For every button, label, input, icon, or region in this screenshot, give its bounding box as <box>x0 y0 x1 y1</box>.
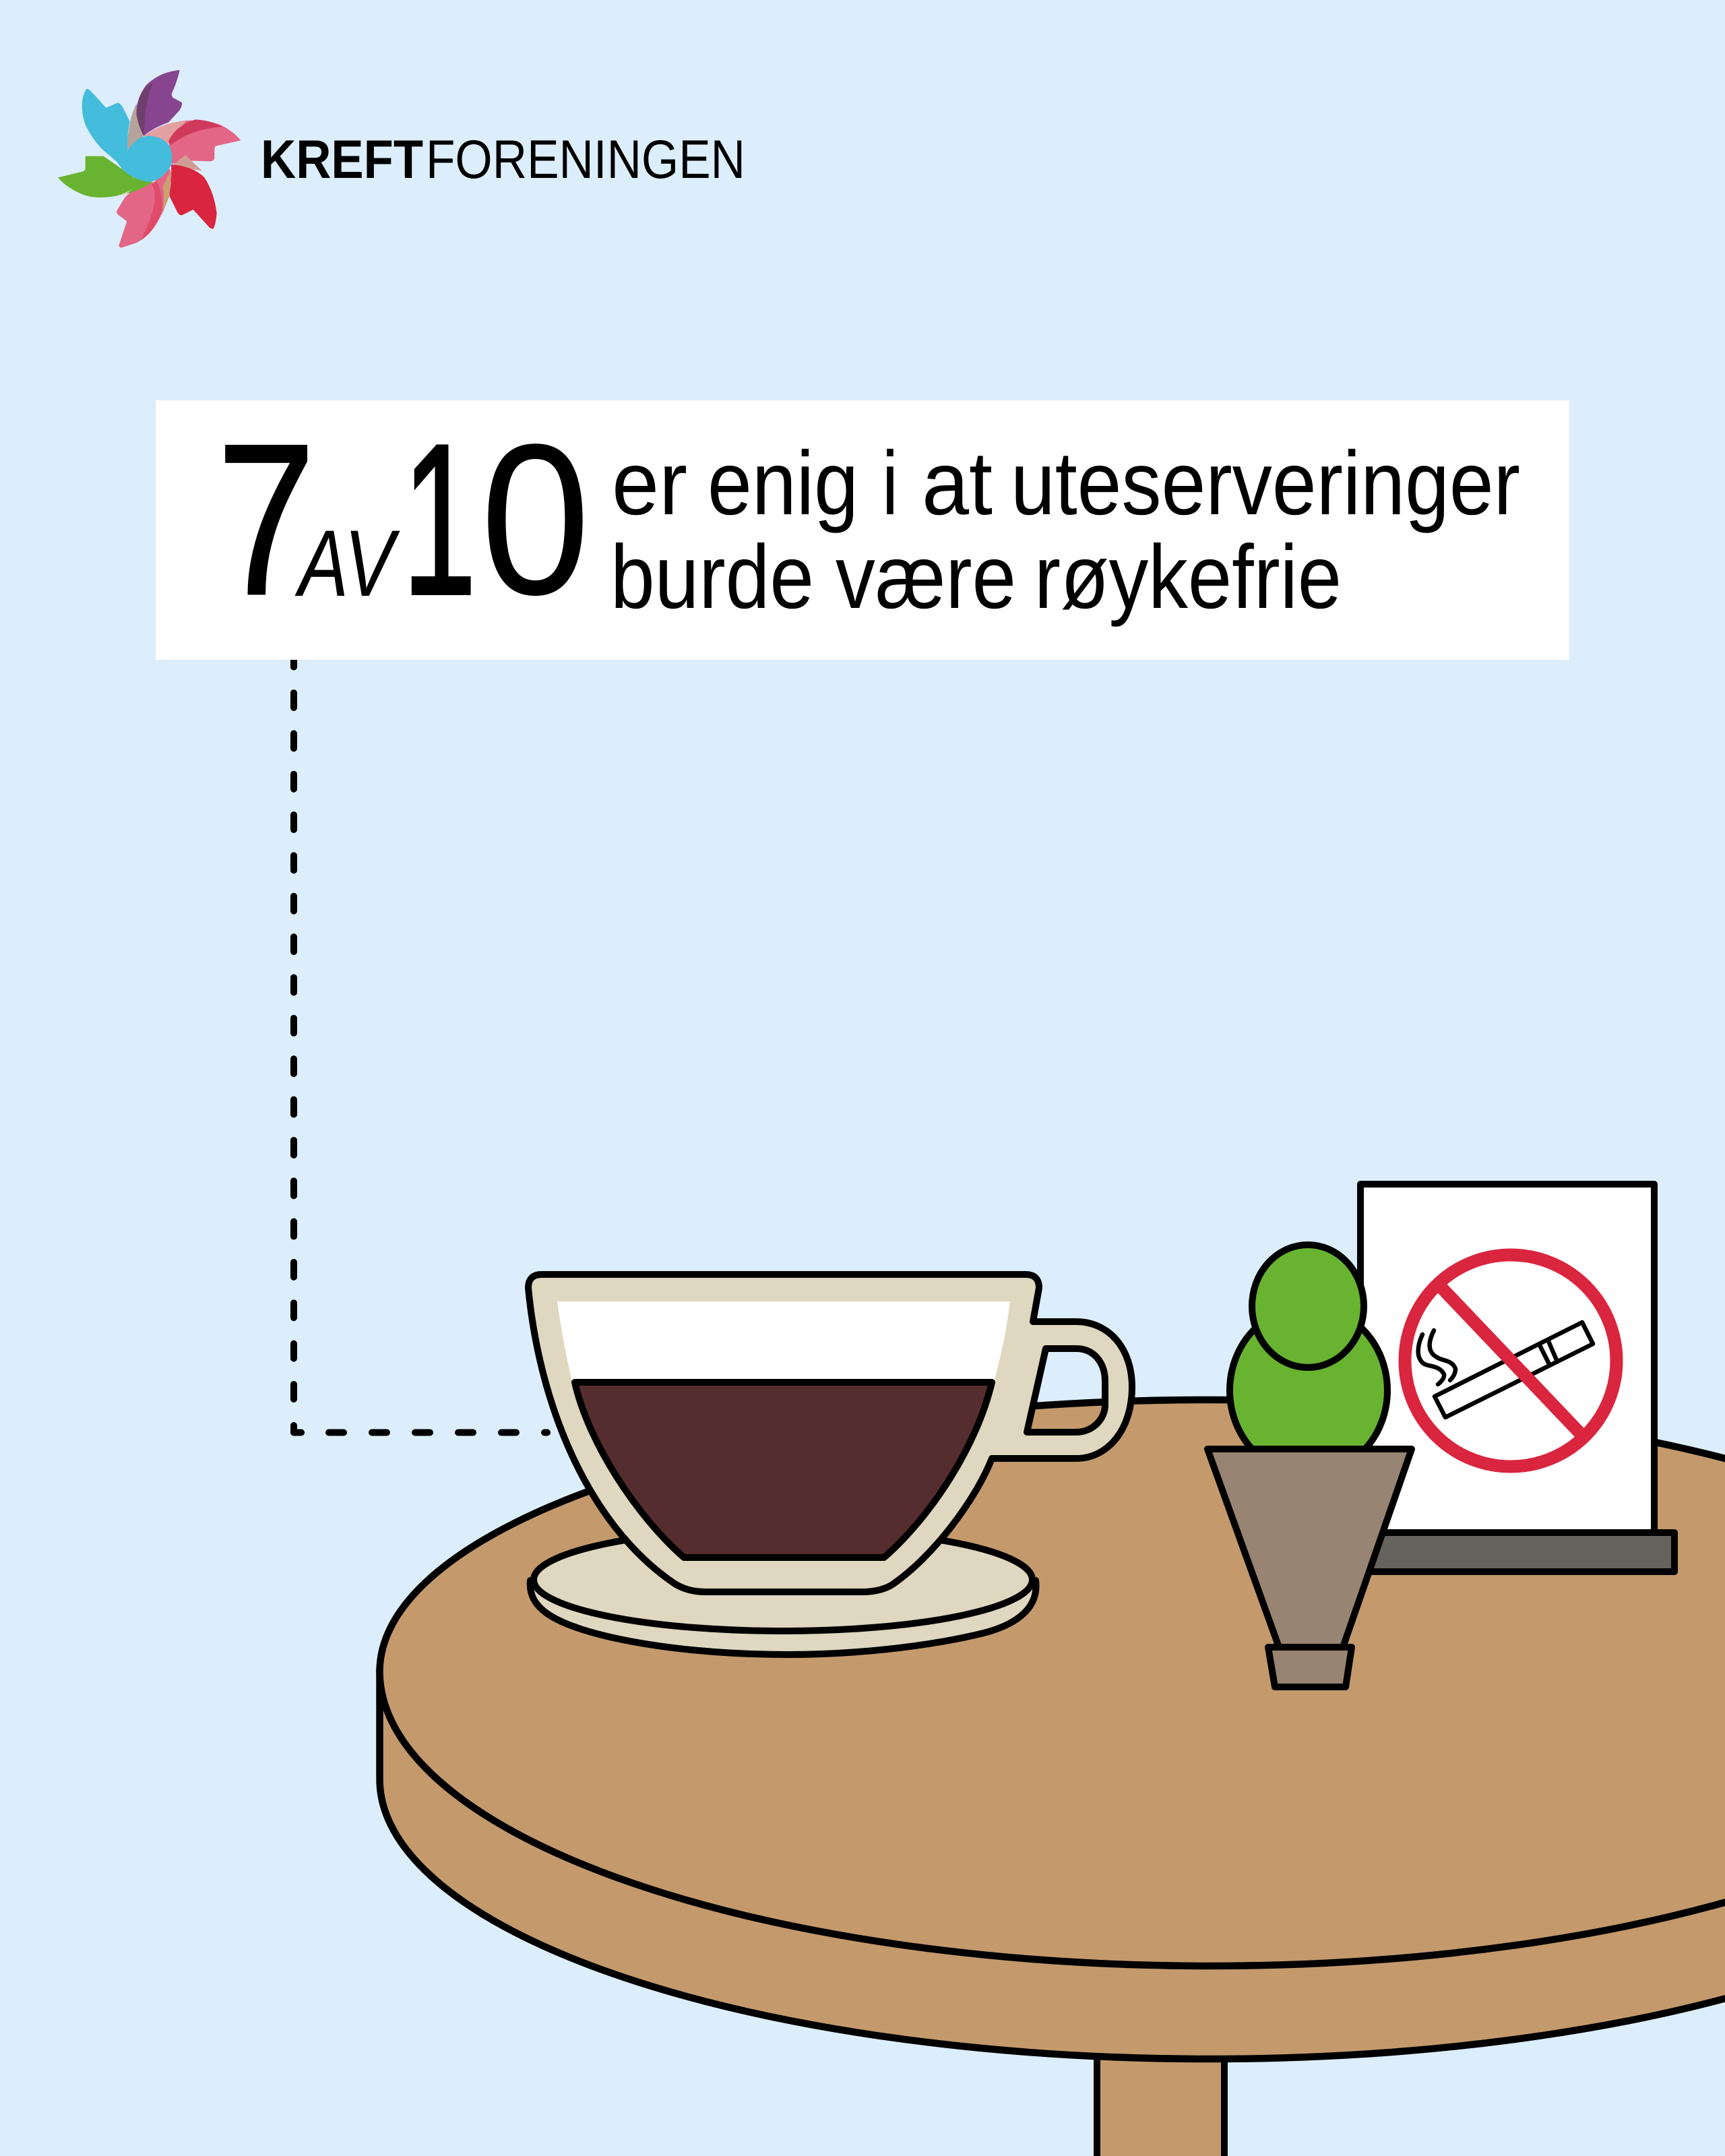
saucer <box>530 1529 1036 1655</box>
cup milk foam <box>557 1301 1010 1382</box>
pot foot <box>1268 1647 1352 1687</box>
headline text: er <box>612 433 687 534</box>
logo wordmark: FORENINGEN <box>426 129 745 190</box>
icon: cigarette with smoke <box>1418 1322 1593 1417</box>
potted plant <box>1208 1245 1412 1687</box>
coffee <box>575 1382 992 1558</box>
plant foliage <box>1230 1245 1387 1475</box>
coffee cup and saucer <box>528 1274 1132 1655</box>
cup body and handle <box>528 1274 1132 1592</box>
logo: Kreftforeningen <box>58 70 745 248</box>
dashed connector line <box>294 652 547 1433</box>
logo wordmark <box>261 129 745 190</box>
icon: flower logo mark <box>58 70 241 248</box>
headline text <box>610 433 1520 627</box>
statistic: 7 av 10: 0 <box>480 399 590 640</box>
headline panel <box>156 399 1569 660</box>
icon: prohibition circle <box>1405 1255 1617 1467</box>
statistic: 7 av 10 <box>217 399 590 640</box>
table leg <box>1097 2049 1224 2156</box>
headline text: burde <box>610 527 814 627</box>
headline text: at <box>922 433 993 534</box>
sign card <box>1360 1184 1654 1533</box>
pot <box>1208 1449 1412 1647</box>
headline text: enig <box>708 433 858 534</box>
headline text: i <box>882 433 898 534</box>
no smoking sign <box>1341 1184 1674 1572</box>
logo wordmark: KREFT <box>261 129 423 190</box>
sign base <box>1341 1533 1674 1572</box>
statistic: 7 av 10: AV <box>294 510 400 616</box>
headline text: uteserveringer <box>1011 433 1520 534</box>
table <box>380 1400 1725 2059</box>
headline text: røykefrie <box>1034 527 1342 627</box>
statistic: 7 av 10: 7 <box>217 399 315 640</box>
headline text: være <box>836 527 1016 627</box>
statistic: 7 av 10: 1 <box>402 399 476 640</box>
